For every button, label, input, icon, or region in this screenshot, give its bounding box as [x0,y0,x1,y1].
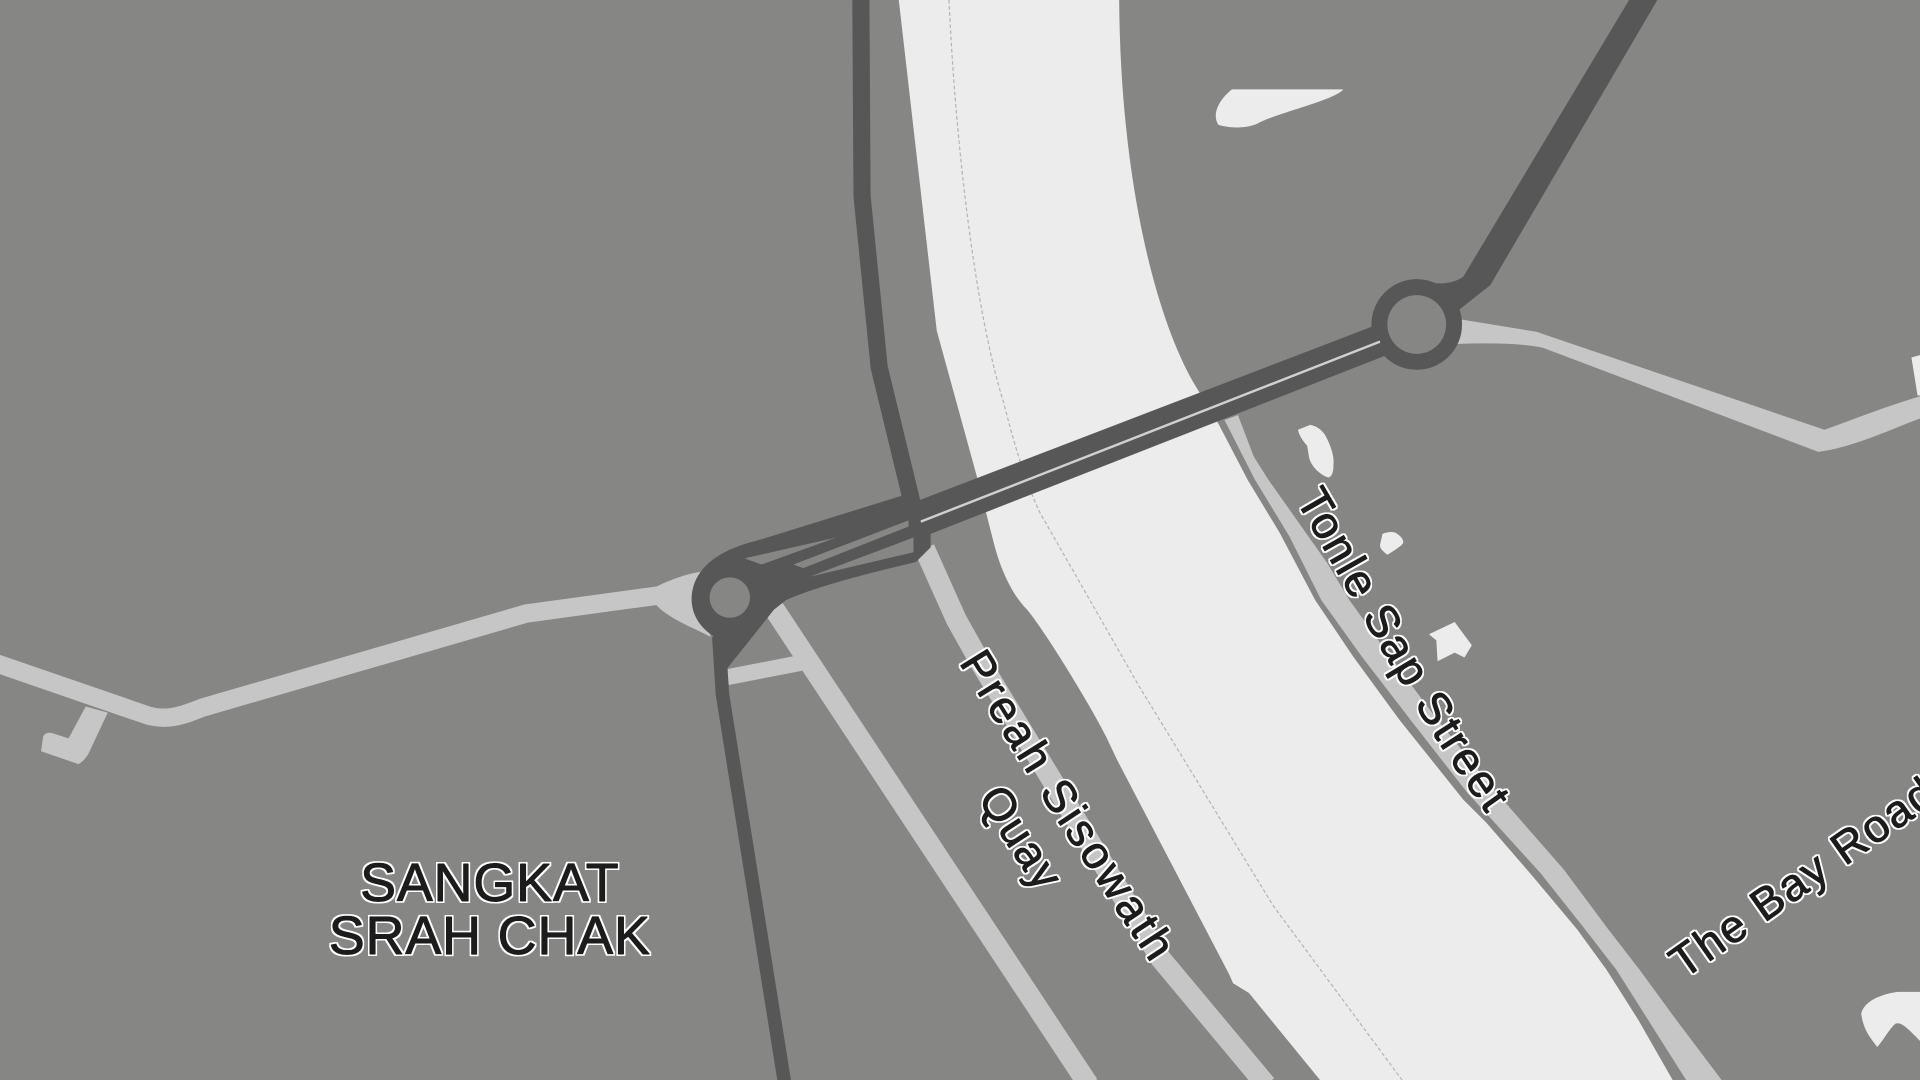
river [899,0,1673,1080]
east roundabout [1371,279,1462,370]
road: east approach [1455,320,1920,452]
road: north-south carriageway [861,0,921,539]
label: Tonle Sap Street: Tonle Sap Street [1299,482,1510,816]
road: connector [727,662,803,677]
west roundabout [693,561,767,634]
bridge centre line [921,342,1380,522]
road: north-east carriageway [1420,0,1662,331]
road: west approach [0,595,661,718]
label: Sangkat Srah Chak: SANGKAT [360,853,619,913]
river centre dashed line [949,0,1402,1080]
minor roads [0,320,1920,1080]
road: southbound diagonal [774,609,1089,1080]
road: Preah Sisowath Quay [924,549,1266,1080]
bridge deck [692,324,1390,670]
major roads [692,0,1662,1080]
road: west spur [41,707,108,764]
label: Quay: Quay [980,786,1061,888]
road: Tonle Sap Street [1224,415,1722,1080]
islands and small water bodies [1216,89,1920,1047]
road: southbound trunk [719,637,785,1080]
junction gaps [710,295,1446,618]
label: Preah Sisowath: Preah Sisowath [958,647,1171,963]
label: Sangkat Srah Chak: SRAH CHAK [329,906,651,966]
west junction taper [651,571,710,637]
